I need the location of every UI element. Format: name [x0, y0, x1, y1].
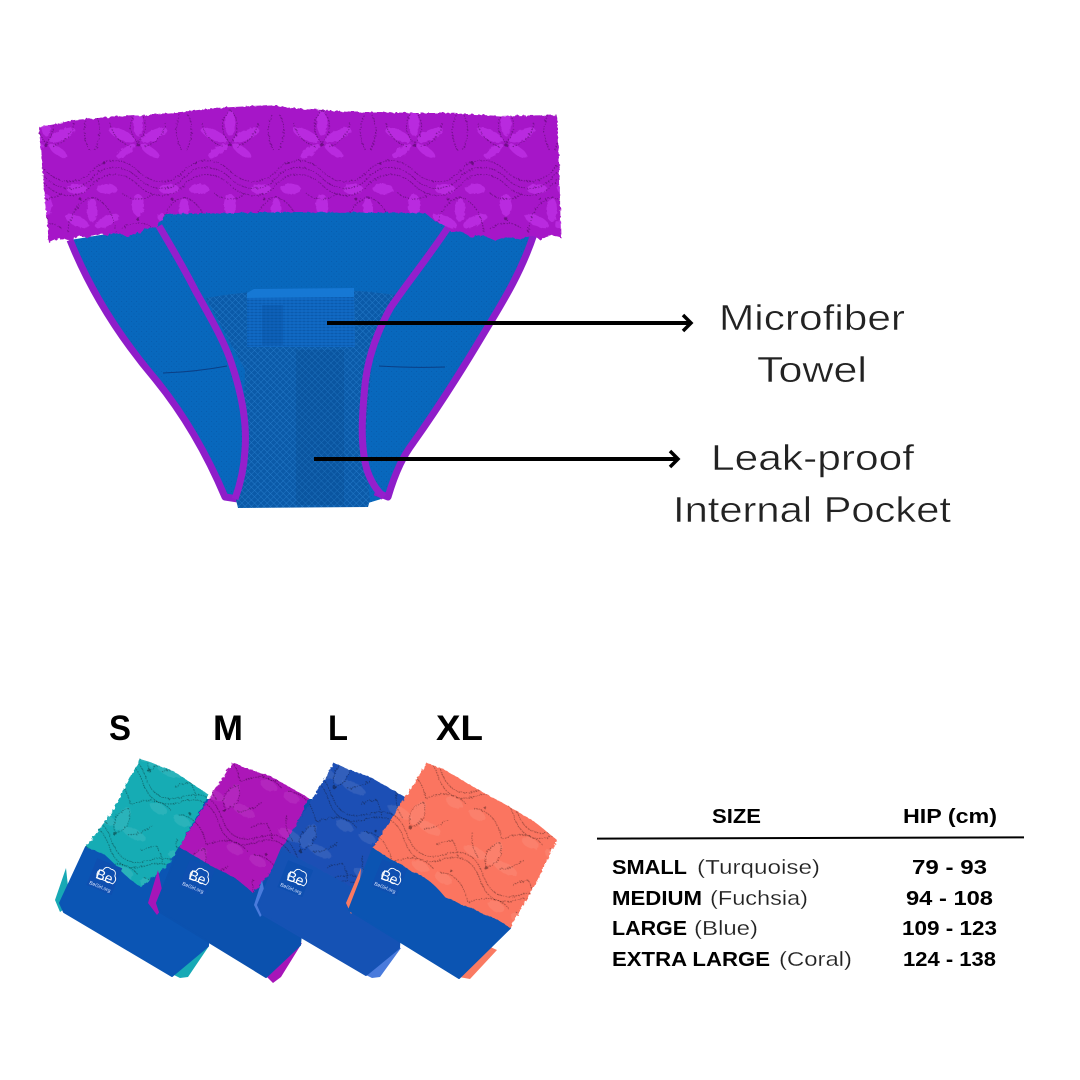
towel top band: [247, 288, 354, 298]
label: leak-proof internal pocket: Internal Pocket: [673, 489, 951, 530]
folded pack: extra large coral: [346, 763, 557, 979]
arrow: microfiber towel: [327, 315, 691, 331]
table header: HIP (cm): [903, 806, 997, 828]
table rule: [597, 837, 1024, 839]
tag: small: BeGirl.org: [88, 880, 112, 894]
label: microfiber towel: Microfiber: [719, 297, 905, 338]
row: extra large: EXTRA LARGE: [612, 949, 770, 971]
label: microfiber towel: [719, 297, 905, 390]
product photo: underwear with pocket: [39, 105, 561, 508]
microfiber towel: [247, 288, 355, 347]
row: extra large: 124 - 138: [903, 949, 996, 971]
left leg binding: [159, 226, 245, 499]
lace waistband: [39, 105, 561, 243]
row: large: LARGE: [612, 918, 687, 940]
tag: medium: Be: [187, 867, 209, 888]
size letters: M: [213, 709, 243, 748]
right leg binding: [362, 226, 449, 497]
label: leak-proof internal pocket: Leak-proof: [711, 437, 915, 478]
folded pack: small turquoise: [55, 759, 215, 978]
tag: extra large: [371, 859, 407, 896]
row: medium: [612, 888, 993, 910]
table header: [712, 806, 997, 828]
arrow: internal pocket: [314, 451, 678, 467]
tag: large: Be: [285, 868, 307, 889]
lace pattern: [39, 105, 561, 243]
row: medium: (Fuchsia): [710, 888, 808, 910]
size table: [597, 806, 1024, 971]
row: large: (Blue): [694, 918, 758, 940]
tag: large: [277, 860, 313, 897]
row: large: [612, 918, 997, 940]
leg seams: [163, 366, 445, 373]
tag: large: BeGirl.org: [279, 882, 303, 896]
row: small: 79 - 93: [912, 857, 987, 879]
row: extra large: (Coral): [779, 949, 852, 971]
pocket shading: [296, 350, 344, 505]
size letters: XL: [436, 709, 483, 748]
underwear body: [70, 210, 534, 503]
tag: medium: [179, 859, 215, 896]
row: extra large: [612, 949, 996, 971]
right outer binding: [375, 234, 534, 497]
label: leak-proof internal pocket: [673, 437, 951, 530]
row: small: (Turquoise): [697, 857, 820, 879]
tag: extra large: Be: [379, 867, 401, 888]
tag: small: [86, 858, 122, 895]
row: large: 109 - 123: [902, 918, 997, 940]
tag: extra large: BeGirl.org: [373, 881, 397, 895]
row: small: [612, 857, 987, 879]
tag: small: Be: [94, 866, 116, 887]
tag: medium: BeGirl.org: [181, 881, 205, 895]
row: small: SMALL: [612, 857, 687, 879]
mesh pocket lower: [236, 345, 370, 508]
towel fold shading: [262, 305, 283, 345]
left outer binding: [70, 240, 238, 499]
size letters: L: [328, 709, 348, 748]
size letters: S: [109, 709, 131, 748]
folded pack: medium fuchsia: [148, 762, 312, 983]
row: medium: MEDIUM: [612, 888, 702, 910]
mesh pocket back: [206, 289, 396, 507]
perforated fabric texture: [70, 210, 534, 503]
folded pack: large blue: [254, 763, 408, 978]
table header: SIZE: [712, 806, 761, 828]
size letters: [109, 709, 483, 748]
row: medium: 94 - 108: [906, 888, 993, 910]
label: microfiber towel: Towel: [757, 349, 867, 390]
